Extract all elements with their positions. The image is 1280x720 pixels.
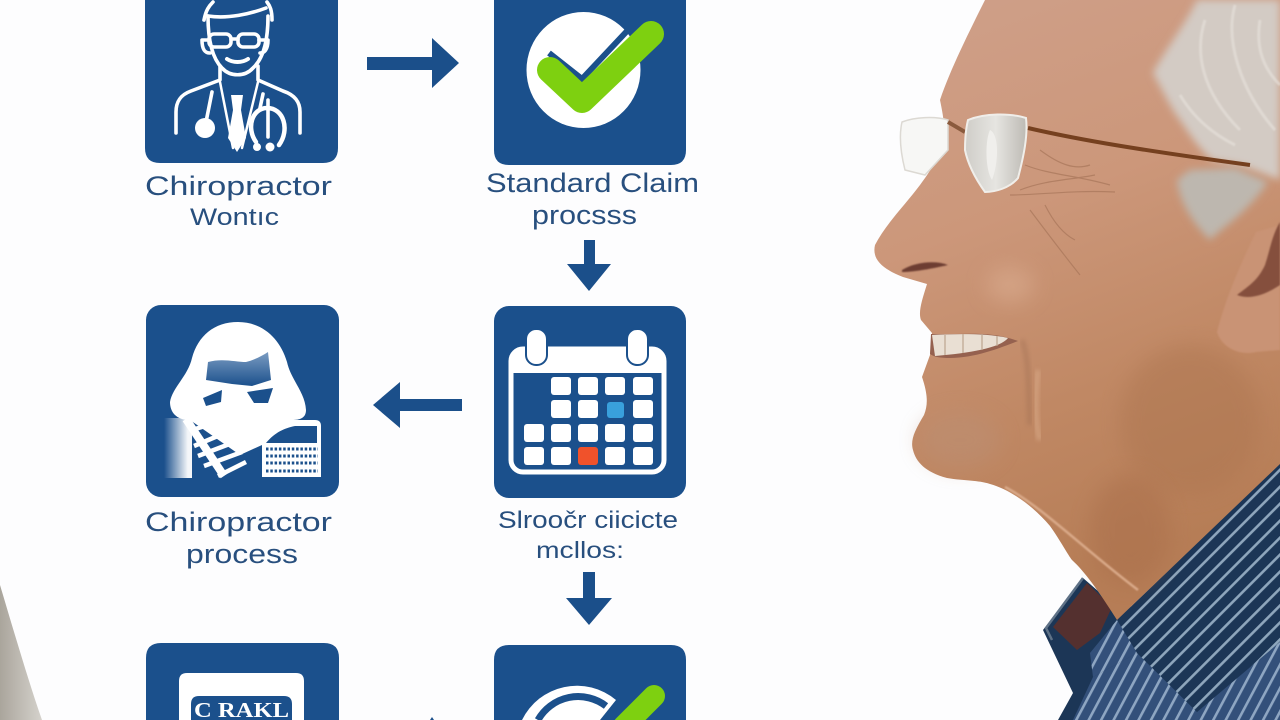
label: chiropractor process: Chiropractor [145,507,332,537]
label: chiropractor wants: Chiropractor [145,171,332,201]
label: chiropractor wants [145,171,332,231]
icon: cropped check [522,686,654,720]
background object at bottom-left edge [0,585,42,720]
step 6: check tile, cropped [494,645,686,720]
eyeglasses [900,114,1250,192]
label: calendar caption: mcllos: [536,537,624,563]
step 1: chiropractor wants [145,0,338,231]
icon: card [179,673,304,720]
label: standard claim process: Standard Claim [486,168,699,198]
photo: smiling older man in profile [874,0,1280,720]
icon: doctor tile [145,0,338,163]
nostril [902,262,948,272]
step 5: card tile, cropped [146,643,339,720]
icon: calendar tile [494,306,686,498]
head and neck [874,0,1280,620]
arrow: down to calendar [567,240,611,291]
arrow: small tip cropped at the bottom [430,717,434,720]
step 3: calendar [494,306,686,563]
face shading [920,267,1260,590]
step 2: standard claim process [486,0,699,230]
label: chiropractor process: process [186,539,298,569]
eye wrinkles [1010,150,1115,275]
mouth and teeth [930,334,1018,358]
icon: patient with calendar tile [146,305,339,497]
arrow: left [373,382,462,428]
label: chiropractor wants: Wontıc [190,204,279,231]
label: calendar caption [498,507,678,563]
arrow: right [367,38,459,88]
step 4: chiropractor process [145,305,339,569]
label: standard claim process: procsss [532,200,637,230]
hair [1153,0,1280,240]
label: chiropractor process [145,507,332,569]
shirt [1043,463,1280,720]
label: standard claim process [486,168,699,230]
icon: check mark tile [494,0,686,165]
arrow: down to lower check [566,572,612,625]
label: calendar caption: Slroočr ciicicte [498,507,678,534]
ear [1217,222,1280,353]
